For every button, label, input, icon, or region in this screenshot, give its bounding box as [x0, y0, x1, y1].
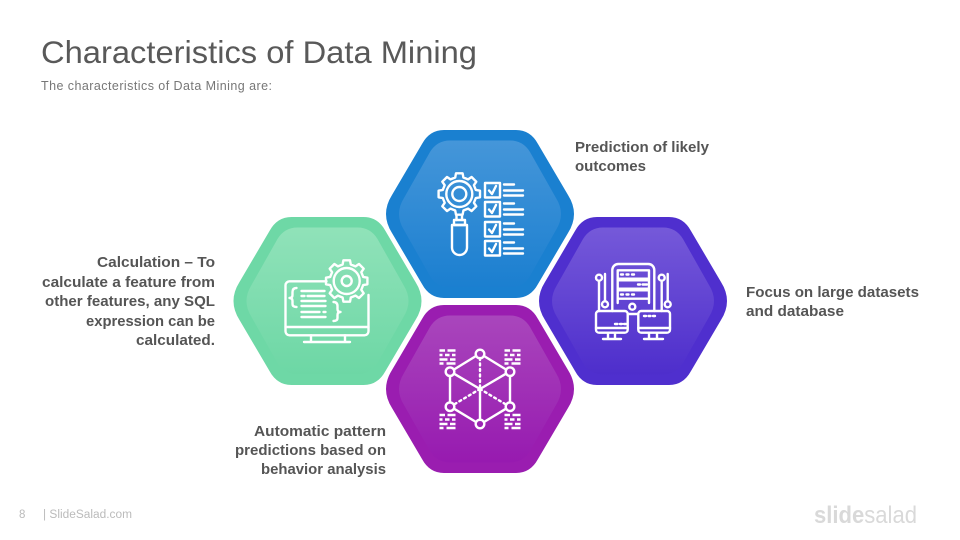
text: automatic pattern predictions: predictions based on: [235, 442, 386, 459]
text: calculation: calculate a feature from: [42, 274, 215, 291]
title: Characteristics of Data Mining: [41, 34, 477, 70]
subtitle: The characteristics of Data Mining are:: [41, 79, 272, 93]
text: calculation: other features, any SQL: [45, 293, 215, 310]
footer text: | SlideSalad.com: [43, 509, 132, 521]
panel: violet hexagon, datasets: [539, 217, 727, 385]
icon: server and computers: [596, 264, 671, 339]
icon: network cube: [440, 350, 520, 428]
text: automatic pattern predictions: Automatic pattern: [254, 423, 386, 440]
text: automatic pattern predictions: [235, 423, 386, 478]
text: prediction of likely outcomes: [575, 139, 710, 175]
text: calculation: calculated.: [136, 332, 215, 349]
text: calculation: Calculation – To: [97, 254, 215, 271]
text: prediction of likely outcomes: outcomes: [575, 158, 646, 175]
icon: magnifier gear with checklist: [439, 173, 523, 256]
text: focus on large datasets: and database: [746, 303, 844, 320]
text: focus on large datasets: [746, 284, 919, 320]
text: calculation: [42, 254, 215, 349]
text: focus on large datasets: Focus on large datasets: [746, 284, 919, 301]
panel: green hexagon, calculation: [234, 217, 422, 385]
panel: magenta hexagon, pattern: [386, 305, 574, 473]
text: calculation: expression can be: [86, 313, 215, 330]
icon: monitor with code and gear: [286, 260, 368, 342]
panel: blue hexagon, prediction: [386, 130, 574, 298]
logo: slidesalad: slidesalad: [814, 502, 917, 529]
page number: 8: [19, 509, 25, 521]
text: prediction of likely outcomes: Prediction of likely: [575, 139, 710, 156]
text: automatic pattern predictions: behavior analysis: [261, 461, 386, 478]
